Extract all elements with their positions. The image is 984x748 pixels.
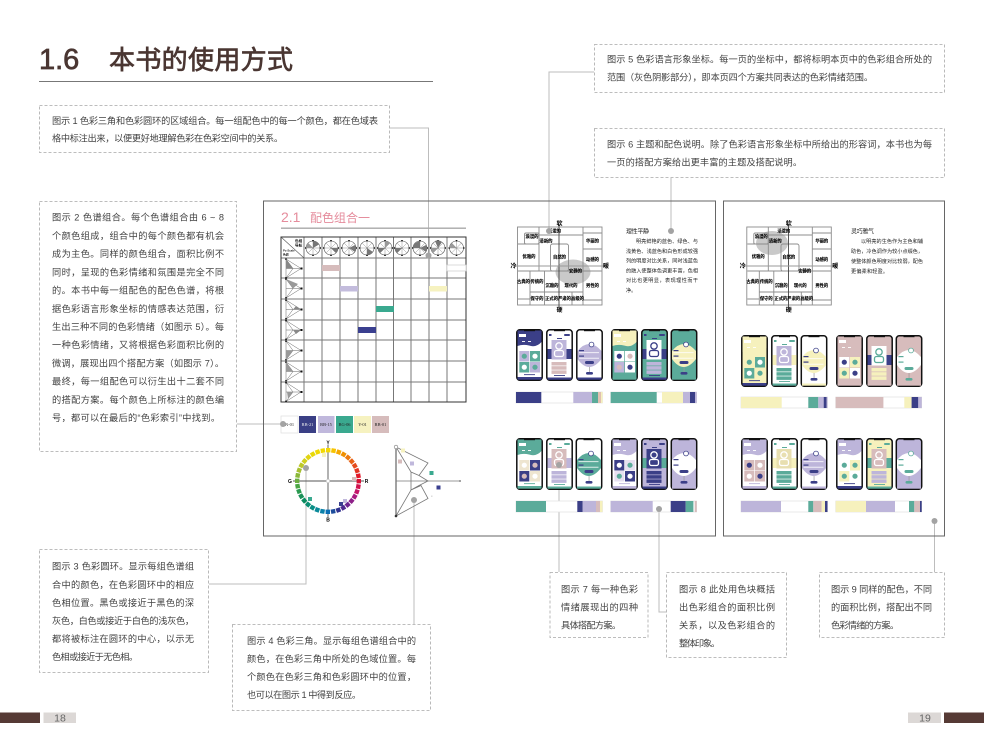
mini color triangles [285, 258, 302, 402]
panel: callout 4: 个颜色在色彩三角和色彩圆环中的位置， [247, 671, 416, 682]
chart: color image scale, left page: 传统的 [531, 278, 544, 285]
text block: theme description, right page: 灵巧雅气 [851, 228, 874, 236]
panel: callout 2: 最终，每一组配色可以衍生出十二套不同 [52, 376, 224, 387]
panel: callout 1 [40, 106, 390, 152]
phone set 8 [837, 439, 922, 489]
panel: right book page [724, 201, 944, 536]
chart: color region table: 色相 [295, 238, 303, 243]
panel: callout 2 [40, 202, 236, 452]
chart: color image scale, right page: 正式的严肃的 [774, 295, 801, 302]
chart: color image scale, left page: 暖 [603, 262, 609, 270]
panel: callout 2: 微调，展现出四个搭配方案（如图示 7）。 [52, 357, 224, 368]
chart: color region table: 导航 [295, 242, 303, 248]
chart: color wheel: G [288, 479, 292, 485]
panel: callout 2: 据色彩语言形象坐标的情感表达范围，衍 [52, 303, 224, 314]
chart: color image scale, left page: 浪漫的 [526, 233, 539, 240]
chart: color region table [281, 237, 466, 402]
text block: theme description, left page [626, 228, 698, 294]
chart: color image scale, right page: 沉稳的 [775, 282, 788, 289]
chart: color image scale, left page: 男性的 [586, 282, 600, 289]
text block: theme description, right page [851, 228, 923, 275]
page number 19 [908, 712, 984, 724]
chart: color image scale, left page: 动感的 [586, 256, 600, 263]
text block: theme description, right page: 助色，冷色调作为较小点缀色， [851, 248, 923, 255]
panel: callout 7: 图示 7 每一种色彩 [561, 584, 638, 594]
panel: callout 8 [666, 572, 786, 658]
panel: callout 2: 成为主色。同样的颜色组合，面积比例不 [52, 248, 224, 259]
chart: color image scale, right page: 现代的 [794, 282, 807, 289]
panel: callout 1: 图示 1 色彩三角和色彩圆环的区域组合。每一组配色中的每一个颜色，都在色域表 [52, 115, 378, 126]
panel: callout 2: 的。本书中每一组配色的配色色谱，将根 [52, 285, 224, 296]
panel: callout 4: 图示 4 色彩三角。显示每组色谱组合中的 [247, 635, 416, 646]
panel: callout 8: 关系，以及色彩组合的 [679, 620, 775, 630]
text block: theme description, right page: 更偏柔和轻盈。 [851, 268, 888, 275]
table colored cells [322, 265, 466, 333]
panel: callout 3: 合中的颜色，在色彩圆环中的相应 [52, 579, 194, 590]
panel: callout 4: 也可以在图示 1 中得到反应。 [247, 689, 361, 700]
heading: section 2.1: 配色组合一 [310, 209, 370, 226]
color swatches: N-01 [285, 422, 294, 427]
panel: callout 8: 出色彩组合的面积比例 [679, 602, 775, 612]
chart: color image scale, right page: 动感的 [815, 256, 829, 263]
chart: color image scale, right page: 冷 [740, 262, 746, 270]
chart: color image scale, right page: 清新的 [769, 238, 782, 244]
panel: callout 9: 的面积比例，搭配出不同 [831, 602, 932, 612]
panel: callout 3: 灰色，白色或接近于白色的浅灰色， [52, 615, 194, 626]
text block: theme description, left page: 明亮鲜艳的蓝色、绿色、与 [636, 238, 698, 245]
chart: color image scale, left page: 沉稳的 [546, 282, 559, 289]
panel: callout 2: 同时，呈现的色彩情绪和氛围是完全不同 [52, 266, 224, 277]
panel: callout 8: 整体印象。 [679, 638, 720, 648]
chart: color image scale, left page: 硬 [556, 307, 563, 314]
text block: theme description, right page: 以明亮的生色作为主色和辅 [861, 238, 923, 245]
chart: color image scale, right page: 活泼的 [777, 228, 791, 234]
panel: callout 4: 颜色，在色彩三角中所处的色域位置。每 [247, 653, 416, 664]
panel: callout 6: 一页的搭配方案给出更丰富的主题及搭配说明。 [607, 156, 802, 168]
phone set 1 [517, 330, 602, 380]
chart: color wheel [288, 440, 369, 524]
panel: callout 7: 具体搭配方案。 [561, 620, 621, 630]
panel: callout 3: 色相位置。黑色或接近于黑色的深 [52, 597, 194, 608]
color swatches: RB-15 [320, 422, 333, 427]
text block: theme description, left page: 净。 [626, 287, 636, 294]
page number 18: 18 [54, 712, 66, 724]
chart: color image scale, left page: 清新的 [540, 238, 553, 244]
panel: callout 6 [594, 128, 944, 178]
chart: color image scale, right page: 华丽的 [815, 238, 829, 244]
panel: callout 2: 生出三种不同的色彩情绪（如图示 5）。每 [52, 321, 224, 332]
chart: color image scale, left page: 现代的 [565, 282, 578, 289]
chart: color triangle [394, 445, 461, 517]
chart: color image scale, left page: 古典的 [517, 278, 531, 285]
panel: callout 4 [232, 624, 430, 710]
text block: theme description, left page: 理性平静 [626, 228, 649, 236]
panel: callout 7: 情绪展现出的四种 [561, 602, 638, 612]
chart: color image scale, right page: 硬 [786, 307, 792, 314]
chart: color image scale, right page [740, 220, 838, 314]
callout anchor dots [280, 228, 938, 524]
color proportion bars, left page [516, 392, 697, 512]
panel: callout 1: 格中标注出来，以便更好地理解色彩在色彩空间中的关系。 [52, 132, 283, 144]
chart: color image scale, left page: 华丽的 [586, 238, 600, 244]
text block: theme description, left page: 列的明度对比关系，同时浅蓝色 [626, 258, 698, 264]
panel: callout 6: 图示 6 主题和配色说明。除了色彩语言形象坐标中所给出的形容词，本书也为每 [607, 138, 932, 150]
panel: callout 5: 图示 5 色彩语言形象坐标。每一页的坐标中，都将标明本页中的色彩组合所处的 [607, 54, 932, 64]
phone set 2 [612, 330, 697, 380]
chart: color image scale, right page: 保守的 [760, 295, 773, 302]
chart: color image scale, right page: 软 [786, 220, 792, 228]
color swatches [281, 416, 389, 433]
chart: color image scale, left page: 正式的严肃的 [545, 295, 572, 302]
text block: theme description, left page: 对比也更明显，表现理性而干 [626, 277, 698, 284]
text block: theme description, left page: 浅黄色、浅蓝色和白色形成较强 [626, 248, 698, 255]
chart: color image scale, right page: 优雅的 [752, 253, 765, 260]
phone set 7 [742, 439, 827, 489]
panel: callout 9: 图示 9 同样的配色，不同 [831, 584, 932, 594]
text block: theme description, right page: 使整体颜色明度对比较弱，配色 [851, 258, 923, 265]
panel: callout 8: 图示 8 此处用色块概括 [679, 584, 775, 594]
page number 19: 19 [919, 712, 931, 724]
panel: callout 3: 图示 3 色彩圆环。显示每组色谱组 [52, 560, 194, 572]
phone set 4 [612, 439, 697, 489]
chart: color wheel: Y [326, 440, 330, 446]
title: 1.6 [39, 44, 79, 76]
chart: color image scale, right page: 浪漫的 [755, 233, 768, 240]
chart: color image scale, right page: 传统的 [760, 278, 773, 285]
panel: callout 9 [820, 572, 944, 638]
mini color wheels [305, 240, 464, 256]
panel: callout 2: 一种色彩情绪，又将根据色彩面积比例的 [52, 339, 224, 350]
chart: color image scale, left page: 冷 [510, 262, 517, 270]
chart: color image scale, left page: 软 [556, 220, 563, 228]
chart: color image scale, left page: 保守的 [531, 295, 544, 302]
chart: color image scale, right page: 自然的 [782, 254, 796, 260]
chart: color image scale, left page: 安静的 [569, 268, 583, 274]
connector lines [209, 72, 934, 624]
chart: color image scale, left page: 活泼的 [548, 228, 562, 234]
chart: color region table: Pc-Scale [283, 248, 295, 252]
panel: callout 2: 的搭配方案。每个颜色上所标注的颜色编 [52, 394, 224, 405]
panel: callout 3: 都将被标注在圆环的中心，以示无 [52, 633, 194, 644]
heading: section 2.1 [281, 209, 466, 229]
chart: color region table: 色调 [283, 252, 289, 256]
title: 本书的使用方式 [109, 40, 293, 77]
chart: color image scale, right page: 安静的 [798, 268, 812, 274]
panel: left book page [264, 201, 716, 536]
panel: callout 5 [594, 44, 944, 92]
chart: color image scale, left page [510, 220, 609, 314]
chart: color image scale, left page: 优雅的 [523, 253, 536, 260]
color swatches: Y-01 [358, 422, 367, 427]
phone set 5 [742, 336, 827, 386]
panel: callout 3: 色相或接近于无色相。 [52, 651, 138, 662]
chart: color image scale, right page: 男性的 [815, 282, 829, 289]
color swatches: BG-06 [339, 422, 351, 427]
chart: color image scale, right page: 高级的 [800, 295, 814, 302]
chart: color wheel: R [365, 479, 369, 485]
panel: callout 2: 图示 2 色谱组合。每个色谱组合由 6 ~ 8 [52, 212, 224, 222]
panel: callout 2: 个颜色组成，组合中的每个颜色都有机会 [52, 230, 224, 241]
text block: theme description, left page: 的融入使整体色调更丰富，色相 [626, 268, 698, 274]
phone set 3 [517, 439, 602, 489]
heading: section 2.1: 2.1 [281, 209, 301, 225]
color swatches: RB-01 [375, 422, 386, 427]
panel: callout 7 [550, 572, 648, 638]
panel: callout 9: 色彩情绪的方案。 [831, 620, 899, 630]
chart: color image scale, right page: 古典的 [746, 278, 760, 285]
panel: callout 3 [40, 550, 208, 672]
chart: color wheel: B [326, 518, 330, 524]
panel: callout 5: 范围（灰色阴影部分），即本页四个方案共同表达的色彩情绪范围。 [607, 72, 873, 82]
chart: color image scale, right page: 暖 [832, 262, 838, 270]
chart: color image scale, left page: 自然的 [553, 254, 567, 260]
page number 18 [0, 712, 76, 724]
color swatches: RB-21 [302, 422, 313, 427]
panel: callout 2: 号，都可以在最后的“色彩索引”中找到。 [52, 412, 220, 423]
color proportion bars, right page [741, 397, 922, 512]
phone set 6 [837, 336, 922, 386]
chart: color image scale, left page: 高级的 [571, 295, 585, 302]
